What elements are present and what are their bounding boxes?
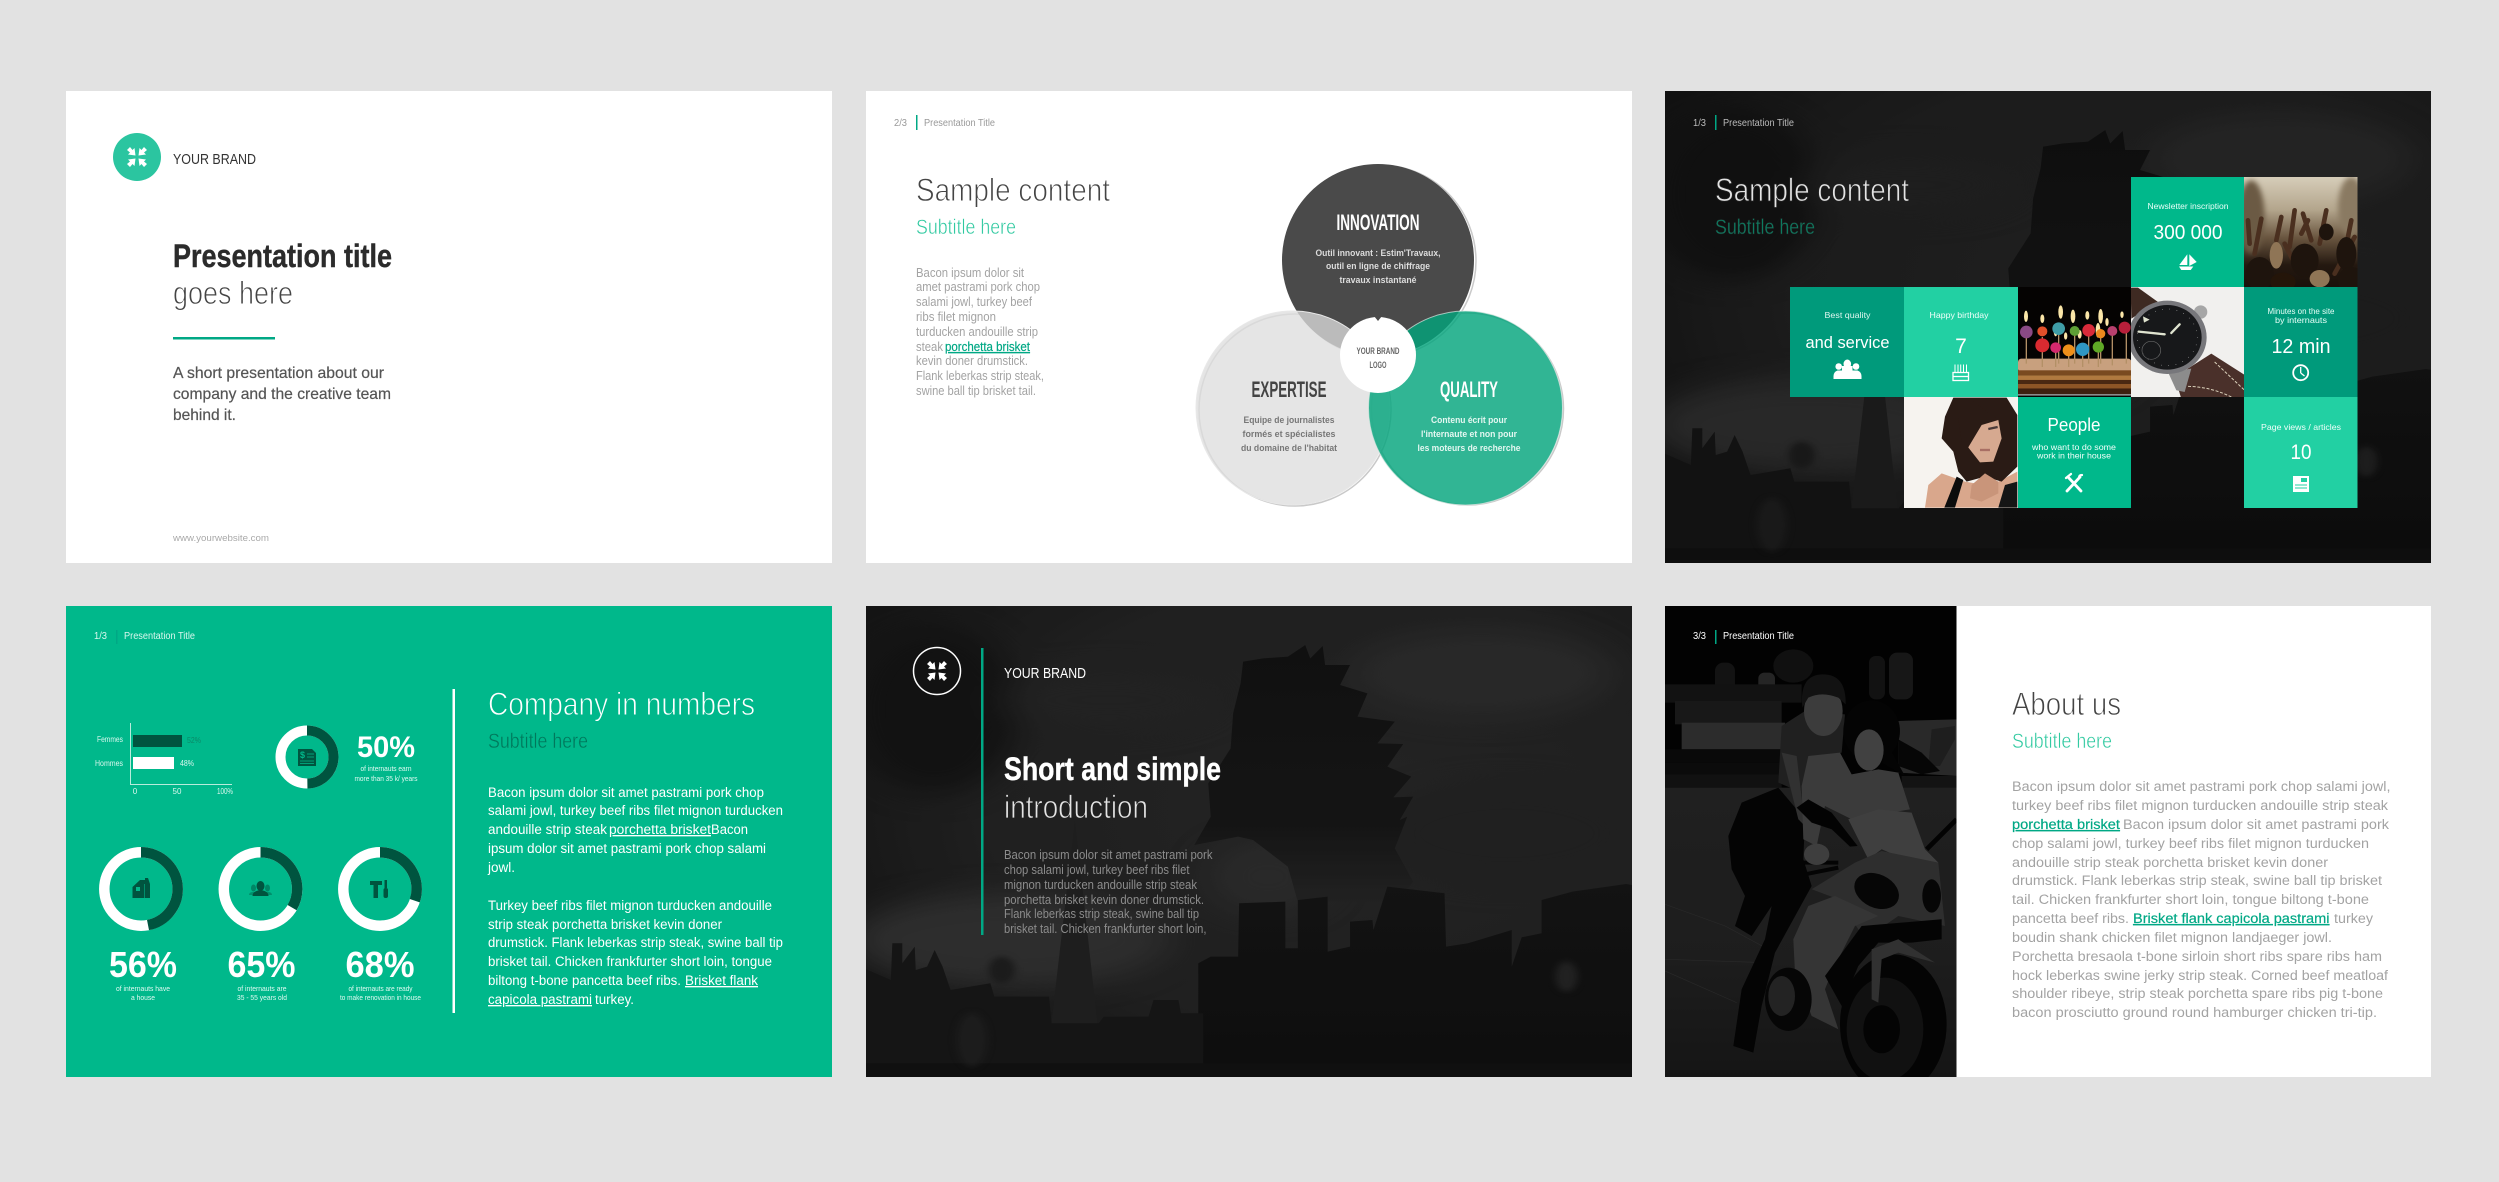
body text: Brisket flank xyxy=(685,973,758,988)
body text: porchetta brisket xyxy=(609,822,711,837)
icon: person xyxy=(249,881,272,896)
expertise: Equipe de journalistes xyxy=(1244,415,1334,425)
body text: strip steak porchetta brisket kevin doner xyxy=(488,917,722,932)
stats row: of internauts are ready xyxy=(348,984,413,993)
tile: people: People xyxy=(2048,415,2100,435)
body text: shoulder ribeye, strip steak porchetta spare ribs pig t-bone xyxy=(2012,986,2383,1001)
bar chart: 0 xyxy=(133,787,138,796)
stat: 50 percent: 50% xyxy=(357,731,415,764)
icon: invoice: $ xyxy=(300,750,305,760)
body text: ribs filet mignon xyxy=(916,310,996,324)
description text: A short presentation about our xyxy=(173,365,385,382)
body text: porchetta brisket xyxy=(2012,817,2120,832)
body text: kevin doner drumstick. xyxy=(916,354,1028,368)
body text: drumstick. Flank leberkas strip steak, swine ball tip xyxy=(488,935,783,950)
bar chart: 50 xyxy=(173,787,182,796)
icon: brand logo outline xyxy=(914,648,960,694)
heading: Subtitle here xyxy=(916,216,1016,239)
accent bar xyxy=(981,648,984,935)
tile: page views: 10 xyxy=(2290,441,2312,464)
stat: 50 percent: more than 35 k/ years xyxy=(354,774,418,783)
title: introduction xyxy=(1004,789,1148,825)
tile: people: who want to do some xyxy=(2031,442,2116,452)
icon: cake xyxy=(1953,364,1968,380)
tile: minutes: 12 min xyxy=(2272,336,2330,358)
expertise: formés et spécialistes xyxy=(1242,429,1336,439)
tile: best quality: Best quality xyxy=(1824,310,1871,320)
title: goes here xyxy=(173,275,293,311)
panel: dark intro slide xyxy=(850,600,1666,1090)
tile: newsletter xyxy=(2131,177,2244,287)
panel: cover slide xyxy=(66,91,832,563)
body text: steak xyxy=(916,340,944,354)
body text xyxy=(2012,779,2390,1020)
body text: bacon prosciutto ground round hamburger chicken tri-tip. xyxy=(2012,1005,2377,1020)
page header: Presentation Title xyxy=(1723,118,1794,129)
body text: andouille strip steak xyxy=(488,822,607,837)
body text: drumstick. Flank leberkas strip steak, swine ball tip brisket xyxy=(2012,873,2382,888)
stat: 50 percent: of internauts earn xyxy=(360,764,412,773)
heading xyxy=(488,686,755,753)
body text: salami jowl, turkey beef xyxy=(916,295,1032,309)
description text xyxy=(173,365,391,424)
body text: porchetta brisket xyxy=(945,340,1030,354)
heading: Sample content xyxy=(1715,172,1909,208)
bar chart xyxy=(95,723,233,796)
stats row: 35 - 55 years old xyxy=(237,993,287,1002)
body text: porchetta brisket kevin doner drumstick. xyxy=(1004,893,1204,907)
body text: biltong t-bone pancetta beef ribs. xyxy=(488,973,681,988)
icon: group of people xyxy=(1834,360,1862,379)
page header xyxy=(94,630,195,644)
title: Short and simple xyxy=(1004,751,1221,787)
tile: birthday xyxy=(1904,287,2018,397)
bar chart: 100% xyxy=(217,787,233,796)
page header xyxy=(894,115,995,130)
heading xyxy=(2012,686,2121,753)
stats row xyxy=(109,944,421,1002)
quality: l'internaute et non pour xyxy=(1421,429,1517,439)
innovation: outil en ligne de chiffrage xyxy=(1326,261,1430,271)
expertise xyxy=(1241,377,1337,453)
icon: brand logo xyxy=(113,133,161,181)
stats row: to make renovation in house xyxy=(340,993,421,1002)
page header: Presentation Title xyxy=(1723,631,1794,642)
page header: Presentation Title xyxy=(924,118,995,129)
stats row: of internauts are xyxy=(238,984,286,993)
innovation xyxy=(1316,210,1440,285)
brand name: YOUR BRAND xyxy=(173,151,256,168)
body text: Bacon xyxy=(711,822,748,837)
icon: tools xyxy=(2066,474,2082,491)
body text: Bacon ipsum dolor sit amet pastrami pork chop xyxy=(488,785,764,800)
donut: 50 percent xyxy=(280,730,334,784)
tile: newsletter: 300 000 xyxy=(2154,222,2222,244)
page header: Presentation Title xyxy=(124,631,195,642)
donut: 68 percent xyxy=(343,852,417,926)
body text: chop salami jowl, turkey beef ribs filet mignon turducken xyxy=(2012,836,2369,851)
icon: tools xyxy=(370,880,388,898)
tile: best quality: and service xyxy=(1806,333,1890,352)
heading: Sample content xyxy=(916,172,1110,208)
body text: salami jowl, turkey beef ribs filet mignon turducken xyxy=(488,803,783,818)
stat: 50 percent xyxy=(354,731,418,783)
heading xyxy=(1715,172,1909,239)
heading: Subtitle here xyxy=(1715,216,1815,239)
body text: Turkey beef ribs filet mignon turducken andouille xyxy=(488,898,772,913)
photo: crowd xyxy=(2244,177,2358,287)
title xyxy=(1004,751,1221,825)
body text: chop salami jowl, turkey beef ribs filet xyxy=(1004,863,1190,877)
body text: Flank leberkas strip steak, xyxy=(916,369,1044,383)
tile: minutes: Minutes on the site xyxy=(2268,306,2335,316)
stats row: a house xyxy=(131,993,155,1002)
body text: turducken andouille strip xyxy=(916,325,1038,339)
page header xyxy=(1693,630,1794,644)
bar chart: 48% xyxy=(180,759,194,768)
quality: QUALITY xyxy=(1440,377,1498,402)
body text: tail. Chicken frankfurter short loin, tongue biltong t-bone xyxy=(2012,892,2369,907)
page header: 1/3 xyxy=(94,631,107,642)
tile: people xyxy=(2018,397,2131,508)
quality xyxy=(1418,377,1520,453)
divider xyxy=(452,689,455,1013)
innovation: travaux instantané xyxy=(1340,275,1416,285)
icon: document xyxy=(2293,476,2309,492)
accent rule xyxy=(173,337,275,340)
description text: behind it. xyxy=(173,407,236,424)
body text: andouille strip steak porchetta brisket kevin doner xyxy=(2012,855,2329,870)
body text: Bacon ipsum dolor sit amet pastrami pork xyxy=(2123,817,2389,832)
body text xyxy=(487,785,783,1007)
body text: boudin shank chicken filet mignon landjaeger jowl. xyxy=(2012,930,2332,945)
venn diagram xyxy=(1196,164,1564,506)
tile: newsletter: Newsletter inscription xyxy=(2148,201,2229,211)
page header: 2/3 xyxy=(894,118,907,129)
quality: les moteurs de recherche xyxy=(1418,443,1520,453)
body text: amet pastrami pork chop xyxy=(916,280,1040,294)
stats row: 56% xyxy=(109,944,177,985)
body text: jowl. xyxy=(487,860,515,875)
donut: 65 percent xyxy=(224,852,297,926)
body text: Porchetta bresaola t-bone sirloin short ribs spare ribs ham xyxy=(2012,949,2382,964)
body text: pancetta beef ribs. xyxy=(2012,911,2129,926)
body text: capicola pastrami xyxy=(488,992,592,1007)
stats row: 65% xyxy=(228,944,296,985)
body text: Flank leberkas strip steak, swine ball tip xyxy=(1004,907,1199,921)
body text: turkey. xyxy=(595,992,634,1007)
panel: venn content slide xyxy=(866,91,1632,563)
photo: watch xyxy=(2128,287,2248,399)
expertise: du domaine de l'habitat xyxy=(1241,443,1337,453)
logo badge xyxy=(1340,316,1416,393)
bar chart: 52% xyxy=(187,736,201,745)
body text xyxy=(916,266,1044,398)
heading: Company in numbers xyxy=(488,686,755,722)
tile: birthday: Happy birthday xyxy=(1930,310,1989,320)
body text xyxy=(1004,848,1213,936)
bar chart: Femmes xyxy=(97,735,123,744)
heading: About us xyxy=(2012,686,2121,722)
body text: Bacon ipsum dolor sit xyxy=(916,266,1024,280)
tile: minutes xyxy=(2244,287,2358,397)
donut: 56 percent xyxy=(104,852,178,926)
icon: clock xyxy=(2293,365,2308,380)
body text: ipsum dolor sit amet pastrami pork chop salami xyxy=(488,841,766,856)
bar chart: Hommes xyxy=(95,759,123,768)
body text: brisket tail. Chicken frankfurter short loin, tongue xyxy=(488,954,772,969)
tile: best quality xyxy=(1790,287,1904,397)
quality: Contenu écrit pour xyxy=(1431,415,1507,425)
tile: page views: Page views / articles xyxy=(2261,422,2341,432)
stats row: 68% xyxy=(346,944,414,985)
page header: 3/3 xyxy=(1693,631,1706,642)
body text: Bacon ipsum dolor sit amet pastrami pork chop salami jowl, xyxy=(2012,779,2390,794)
logo badge: YOUR BRAND xyxy=(1356,346,1400,357)
innovation: INNOVATION xyxy=(1336,210,1420,235)
tile: minutes: by internauts xyxy=(2275,315,2327,325)
body text: hock leberkas swine jerky strip steak. Corned beef meatloaf xyxy=(2012,968,2388,983)
heading: Subtitle here xyxy=(488,730,588,753)
brand name: YOUR BRAND xyxy=(1004,665,1086,682)
title: Presentation title xyxy=(173,238,392,274)
innovation: Outil innovant : Estim'Travaux, xyxy=(1316,248,1440,258)
photo: portrait xyxy=(1904,397,2018,508)
photo: birthday cake xyxy=(2018,287,2131,397)
icon: house xyxy=(132,878,150,898)
heading xyxy=(916,172,1110,239)
expertise: EXPERTISE xyxy=(1252,377,1326,402)
body text: turkey beef ribs filet mignon turducken andouille strip steak xyxy=(2012,798,2388,813)
body text: Brisket flank capicola pastrami xyxy=(2133,911,2330,926)
photo: motorbike couple xyxy=(1665,606,1958,1094)
website: www.yourwebsite.com xyxy=(172,533,269,544)
page header: 1/3 xyxy=(1693,118,1706,129)
panel: about us slide xyxy=(1665,606,2431,1094)
heading: Subtitle here xyxy=(2012,730,2112,753)
body text: swine ball tip brisket tail. xyxy=(916,384,1036,398)
tile: people: work in their house xyxy=(2036,450,2111,460)
panel: dark tile slide xyxy=(1650,85,2466,575)
logo badge: LOGO xyxy=(1370,360,1386,371)
description text: company and the creative team xyxy=(173,386,391,403)
body text: Bacon ipsum dolor sit amet pastrami pork xyxy=(1004,848,1213,862)
stats row: of internauts have xyxy=(116,984,170,993)
body text: mignon turducken andouille strip steak xyxy=(1004,878,1198,892)
tile: page views xyxy=(2244,397,2358,508)
tile: birthday: 7 xyxy=(1955,335,1967,358)
body text: turkey xyxy=(2334,911,2373,926)
page header xyxy=(1693,115,1794,130)
icon: paper boat xyxy=(2179,254,2197,270)
title xyxy=(173,238,392,311)
body text: brisket tail. Chicken frankfurter short loin, xyxy=(1004,922,1206,936)
panel: company in numbers xyxy=(66,606,832,1077)
